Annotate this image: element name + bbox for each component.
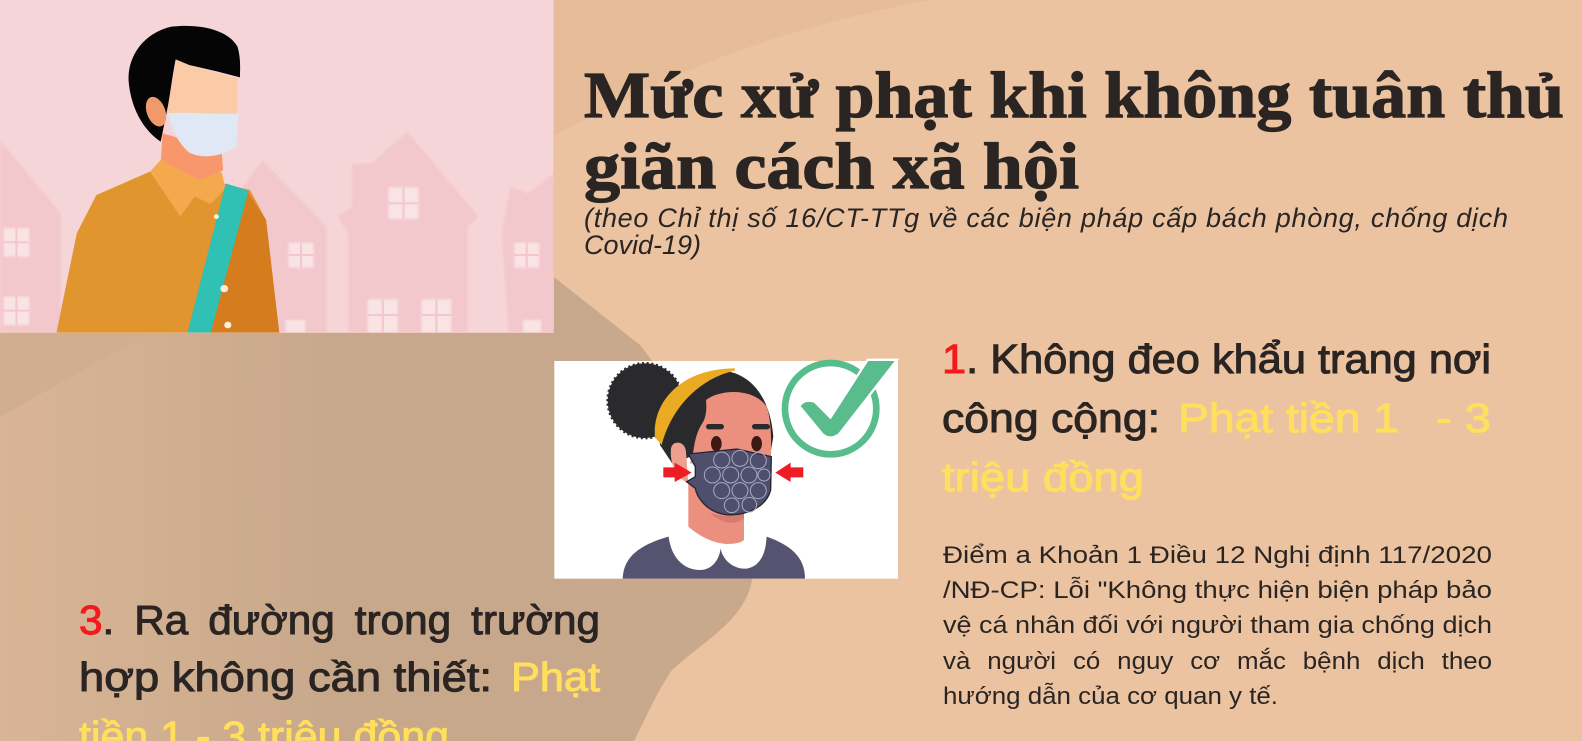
hair bun: [608, 363, 682, 438]
item 1 heading: triệu đồng: [942, 454, 1144, 500]
shadow under mask: [710, 510, 744, 523]
face: [690, 392, 771, 463]
shirt buttons: [214, 214, 231, 328]
item 1 legal reference: vệ cá nhân đối với người tham gia chống dịch: [943, 612, 1492, 639]
house windows: [4, 187, 541, 333]
title: giãn cách xã hội: [584, 130, 1079, 203]
face mask: [169, 113, 239, 156]
ear: [146, 96, 166, 126]
houses in the background: [0, 132, 561, 337]
hair: [129, 26, 240, 142]
item 3 heading: Phạt: [511, 654, 601, 700]
item 1 legal reference: và người có nguy cơ mắc bệnh dịch theo: [943, 648, 1492, 675]
item 1 legal reference: hướng dẫn của cơ quan y tế.: [943, 683, 1278, 710]
illustration: woman wearing a mask correctly: [554, 361, 898, 579]
check mark badge: [785, 361, 895, 454]
illustration: man wearing a face mask: [0, 0, 561, 337]
subtitle: (theo Chỉ thị số 16/CT-TTg về các biện pháp cấp bách phòng, chống dịch: [584, 203, 1508, 233]
title: [584, 59, 1564, 203]
cloth mask: [687, 449, 771, 515]
item 1 heading: Phạt tiền 1: [1178, 395, 1399, 441]
eyebrows and eyes: [706, 424, 770, 451]
item 3 heading: 3. Ra đường trong trường: [79, 597, 600, 643]
headband: [655, 368, 735, 445]
item 1 heading: 1. Không đeo khẩu trang nơi: [942, 336, 1491, 382]
face: [167, 58, 237, 115]
mask pattern: [704, 450, 770, 513]
item 3 heading: [79, 597, 601, 741]
arrow: left red arrow: [663, 463, 692, 482]
arrow: right red arrow: [775, 463, 803, 482]
item 1 heading: công cộng:: [942, 395, 1160, 441]
shoulders: [623, 537, 805, 579]
item 1 heading: [942, 336, 1491, 500]
item 3 heading: hợp không cần thiết:: [79, 654, 492, 700]
item 1 legal reference: Điểm a Khoản 1 Điều 12 Nghị định 117/2020: [943, 542, 1492, 569]
background blob: [0, 277, 752, 741]
shoulder strap: [187, 183, 249, 333]
shirt: [56, 172, 279, 333]
white collar: [668, 533, 767, 570]
item 1 heading: - 3: [1436, 395, 1491, 441]
neck: [161, 133, 223, 183]
hair: [659, 371, 773, 465]
ear: [671, 443, 688, 483]
neck: [688, 483, 744, 544]
item 1 legal reference: /NĐ-CP: Lỗi "Không thực hiện biện pháp bảo: [943, 577, 1492, 604]
title: Mức xử phạt khi không tuân thủ: [584, 59, 1564, 132]
window muntins: [4, 187, 539, 333]
item 1 legal reference: [943, 542, 1492, 710]
subtitle: Covid-19): [584, 230, 701, 260]
collar: [150, 160, 226, 217]
subtitle: [584, 203, 1508, 260]
